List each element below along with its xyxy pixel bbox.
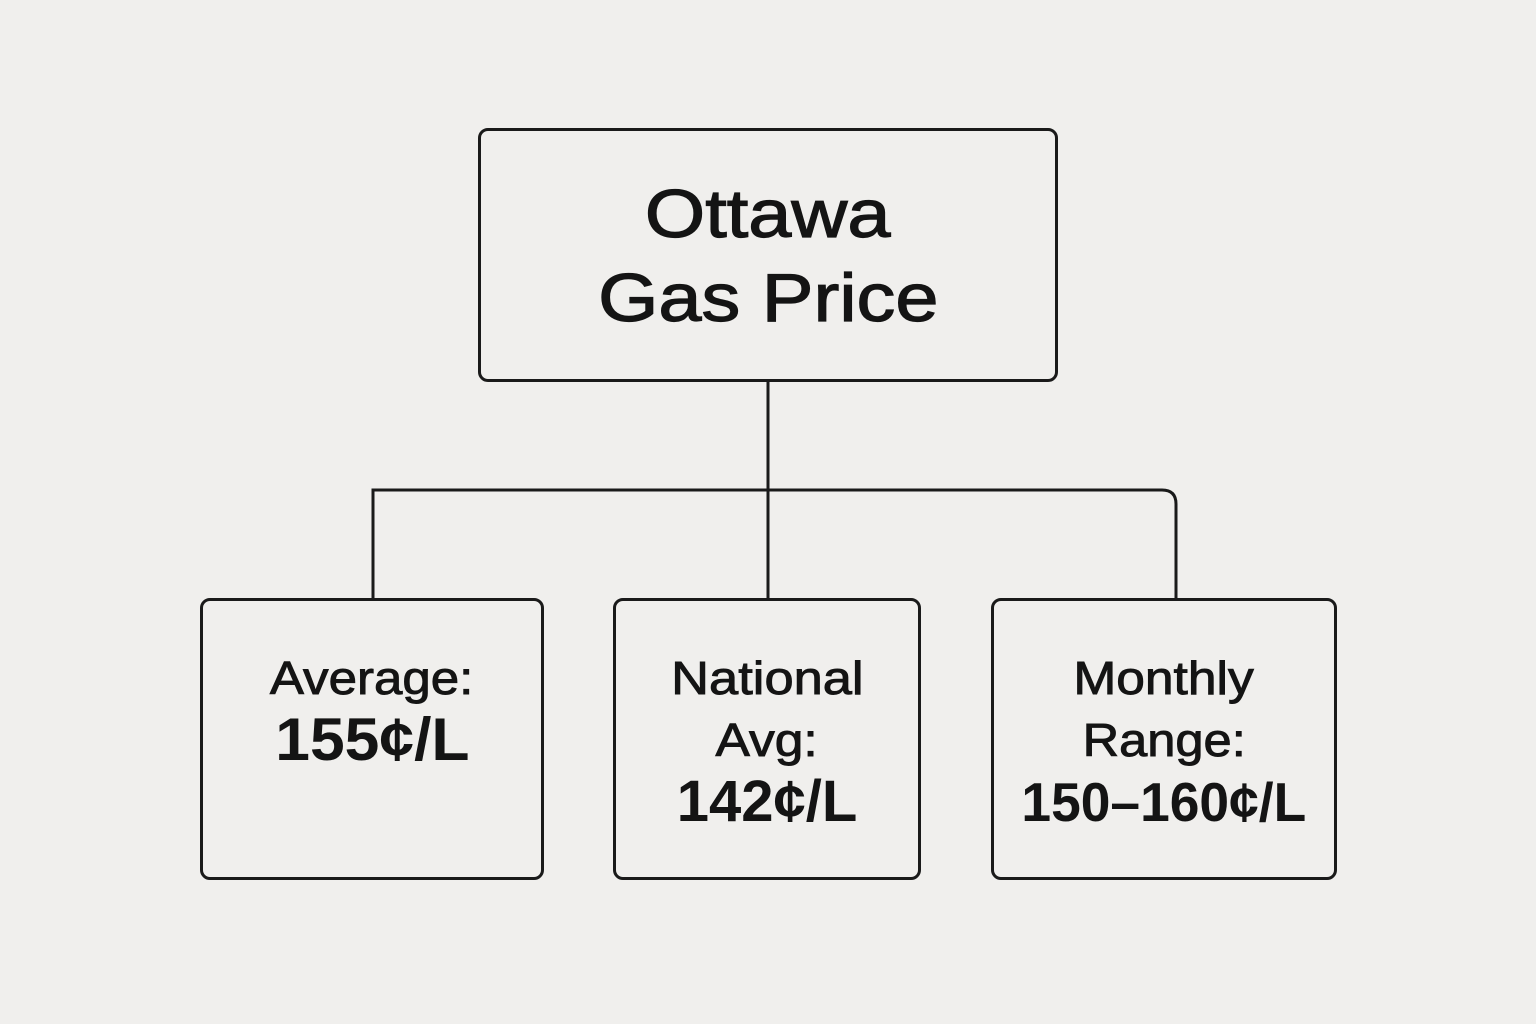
title box <box>478 128 1058 382</box>
national text <box>671 652 863 834</box>
national text: 142¢/L <box>677 769 857 834</box>
average text: 155¢/L <box>275 706 469 773</box>
panel: average <box>200 598 544 880</box>
average text <box>269 652 474 773</box>
title text: Ottawa <box>645 176 891 252</box>
range text: Range: <box>1082 714 1246 766</box>
national text: National <box>671 652 863 704</box>
panel: monthly range <box>991 598 1337 880</box>
range text: Monthly <box>1074 652 1254 704</box>
range text <box>1022 652 1306 833</box>
average text: Average: <box>270 652 474 704</box>
title text <box>598 176 938 336</box>
title text: Gas Price <box>598 260 938 336</box>
panel: national <box>613 598 921 880</box>
national text: Avg: <box>716 714 818 766</box>
range text: 150–160¢/L <box>1022 771 1306 833</box>
